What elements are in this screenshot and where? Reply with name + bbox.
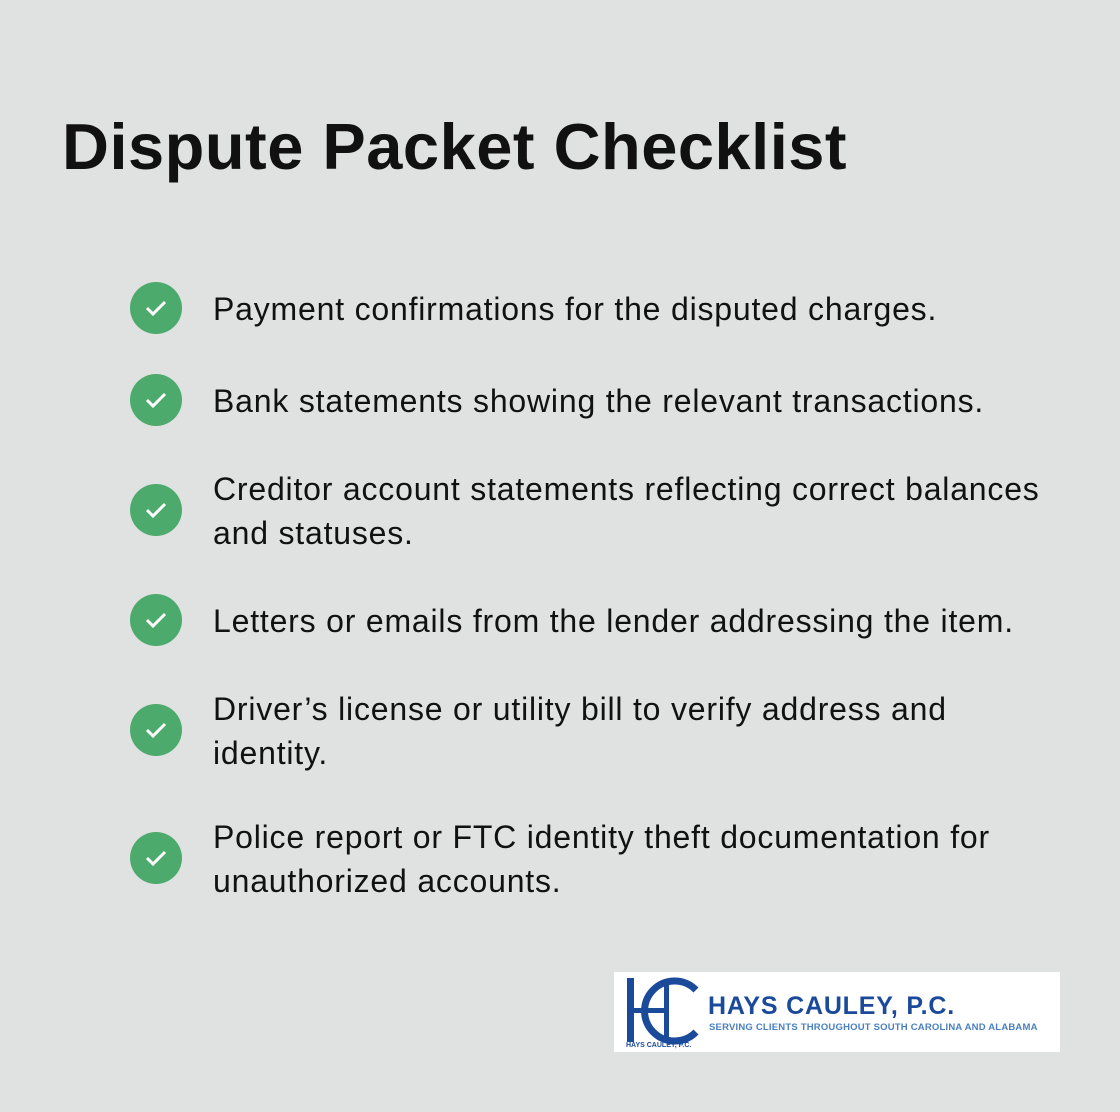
logo name: HAYS CAULEY, P.C. bbox=[708, 992, 955, 1020]
item 5: identity. bbox=[213, 735, 328, 771]
item 6: Police report or FTC identity theft documentation for bbox=[213, 819, 990, 855]
item 5: Driver’s license or utility bill to verify address and bbox=[213, 691, 947, 727]
icon: check 3 bbox=[130, 484, 182, 536]
item 3: Creditor account statements reflecting correct balances bbox=[213, 471, 1040, 507]
icon: check 5 bbox=[130, 704, 182, 756]
logo small text: HAYS CAULEY, P.C. bbox=[626, 1042, 691, 1049]
icon: check 2 bbox=[130, 374, 182, 426]
item 6 bbox=[213, 819, 990, 899]
logo bbox=[614, 972, 1060, 1052]
item 4: Letters or emails from the lender addressing the item. bbox=[213, 603, 1014, 639]
logo mark bbox=[627, 978, 698, 1044]
item 2: Bank statements showing the relevant transactions. bbox=[213, 383, 984, 419]
item 3: and statuses. bbox=[213, 515, 414, 551]
icon: check 4 bbox=[130, 594, 182, 646]
item 6: unauthorized accounts. bbox=[213, 863, 562, 899]
item 1: Payment confirmations for the disputed charges. bbox=[213, 291, 937, 327]
title: Dispute Packet Checklist bbox=[62, 110, 847, 183]
icon: check 1 bbox=[130, 282, 182, 334]
logo tagline: SERVING CLIENTS THROUGHOUT SOUTH CAROLINA AND ALABAMA bbox=[709, 1022, 1038, 1033]
icon: check 6 bbox=[130, 832, 182, 884]
item 3 bbox=[213, 471, 1040, 551]
item 5 bbox=[213, 691, 947, 771]
